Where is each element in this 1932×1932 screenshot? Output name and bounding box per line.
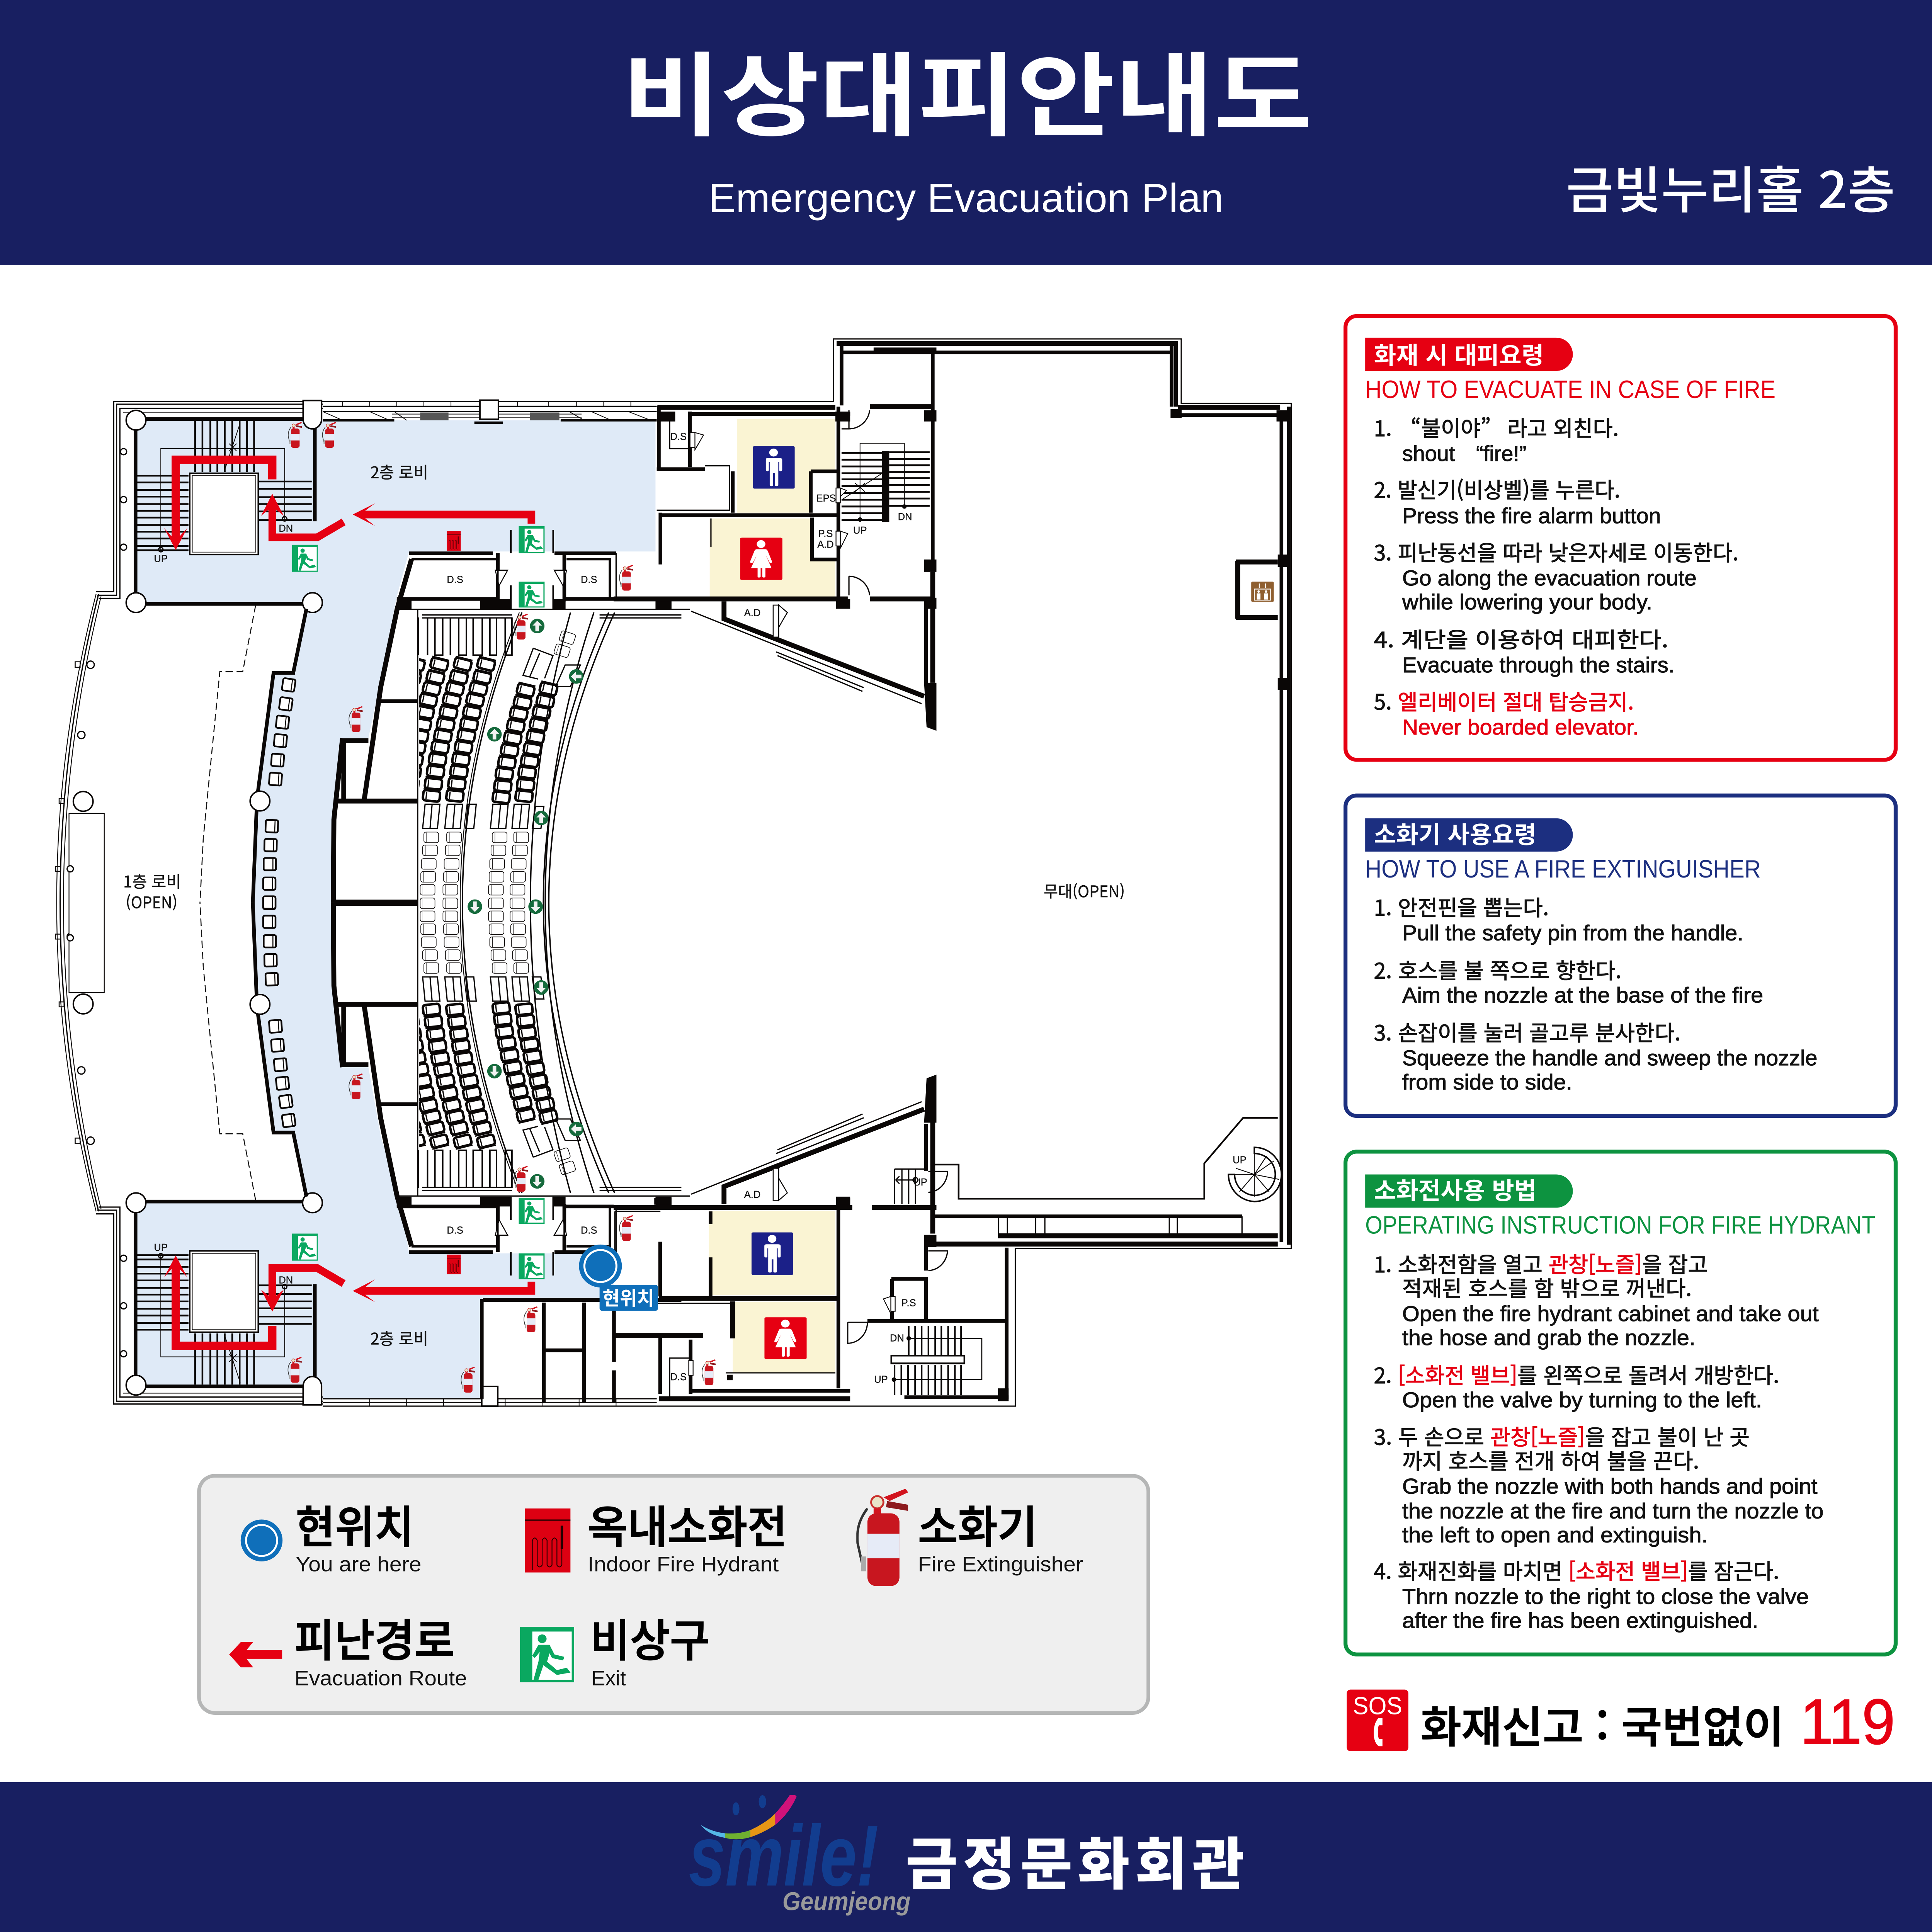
evacuation arrow: upper stair approach	[261, 494, 344, 537]
floor plan	[55, 339, 1291, 1406]
title: Korean: 비상대피안내도	[622, 22, 1312, 155]
instructions: 1. 안전핀을 뽑는다.	[1374, 891, 1549, 922]
plan labels: 무대(OPEN)	[1044, 879, 1125, 902]
lower half structure	[55, 896, 936, 1405]
fire report line	[1347, 1686, 1895, 1758]
legend: indoor hydrant: Indoor Fire Hydrant	[588, 1553, 779, 1576]
plan labels: UP	[1233, 1155, 1247, 1166]
heading text: 화재 시 대피요령	[1374, 337, 1544, 371]
instructions: 5. 엘리베이터 절대 탑승금지.	[1374, 685, 1634, 716]
instructions: 라고 외친다.	[1507, 412, 1619, 443]
plan labels: UP	[874, 1374, 888, 1385]
top window strip	[323, 400, 657, 423]
legend: evacuation route: 피난경로	[294, 1605, 455, 1669]
plan labels: A.D	[817, 539, 834, 550]
instructions: after the fire has been extinguished.	[1402, 1608, 1758, 1633]
instructions: the hose and grab the nozzle.	[1402, 1325, 1696, 1350]
legend: extinguisher: 소화기	[918, 1492, 1037, 1556]
instructions: 2. 발신기(비상벨)를 누른다.	[1374, 473, 1620, 504]
legend: exit: Exit	[592, 1667, 626, 1690]
icon: men's toilet upper	[753, 446, 795, 489]
evacuation arrow: lower stair descent	[164, 1255, 272, 1346]
you are here marker: 현위치	[602, 1284, 654, 1311]
legend: indoor hydrant	[525, 1492, 787, 1576]
panel: how to evacuate	[1345, 316, 1896, 760]
plan labels: DN	[890, 1333, 904, 1344]
instructions: 3. 피난동선을 따라 낮은자세로 이동한다.	[1374, 536, 1738, 567]
instructions: 3. 두 손으로 관창[노즐]을 잡고 불이 난 곳	[1374, 1420, 1750, 1452]
legend: exit: 비상구	[590, 1605, 710, 1669]
plan labels: UP	[154, 1242, 168, 1253]
legend: extinguisher	[857, 1489, 1083, 1586]
instructions: “fire!”	[1476, 441, 1526, 466]
icon: women's toilet lower	[764, 1317, 807, 1359]
evacuation arrow: lower corridor	[353, 1279, 531, 1302]
exit signs	[292, 526, 544, 1279]
plan labels: P.S	[901, 1298, 916, 1309]
icon: women's toilet upper	[740, 538, 782, 580]
plan labels: A.D	[744, 1189, 760, 1200]
instructions: “불이야”	[1411, 412, 1491, 443]
emergency number: 119	[1800, 1686, 1895, 1758]
legend panel	[199, 1476, 1148, 1713]
footer band	[0, 1782, 1932, 1932]
plan labels: D.S	[670, 1372, 687, 1383]
instructions: Grab the nozzle with both hands and point	[1402, 1474, 1818, 1498]
plan labels: DN	[898, 512, 912, 522]
instructions: 2. 호스를 불 쪽으로 향한다.	[1374, 954, 1621, 985]
instructions: Aim the nozzle at the base of the fire	[1402, 983, 1763, 1007]
plan labels: D.S	[581, 575, 597, 585]
bottom left rooms	[482, 1211, 703, 1402]
legend: indoor hydrant: 옥내소화전	[588, 1492, 787, 1556]
icon: SOS phone: SOS	[1353, 1692, 1402, 1719]
legend: you are here: You are here	[296, 1553, 422, 1576]
heading pill	[1365, 1174, 1573, 1208]
plan labels: (OPEN)	[126, 890, 177, 913]
evacuation arrow: lower stair approach	[261, 1268, 344, 1311]
plan labels: 1층 로비	[123, 869, 181, 892]
upper toilets and core	[614, 339, 1291, 1406]
instructions: Never boarded elevator.	[1402, 715, 1639, 739]
plan labels: UP	[154, 553, 168, 564]
bottom window strip	[323, 1386, 657, 1406]
heading text: 소화기 사용요령	[1374, 816, 1536, 850]
instructions: 적재된 호스를 함 밖으로 꺼낸다.	[1402, 1272, 1692, 1303]
plan labels: D.S	[581, 1225, 597, 1236]
english heading: HOW TO EVACUATE IN CASE OF FIRE	[1365, 375, 1776, 403]
icon: SOS phone	[1347, 1690, 1408, 1751]
plan labels: D.S	[447, 1225, 463, 1236]
instructions: the nozzle at the fire and turn the nozzle to	[1402, 1498, 1823, 1523]
legend: you are here: 현위치	[296, 1492, 414, 1556]
evacuation arrow: upper stair descent	[164, 460, 272, 550]
lobby floor area	[136, 420, 655, 1399]
indoor fire hydrants	[447, 531, 461, 1274]
instructions: 3. 손잡이를 눌러 골고루 분사한다.	[1374, 1016, 1680, 1047]
evacuation arrow: upper corridor	[353, 503, 531, 526]
plan labels: DN	[279, 523, 293, 534]
instructions: Go along the evacuation route	[1402, 566, 1697, 590]
plan labels: UP	[853, 525, 867, 536]
instructions: 까지 호스를 전개 하여 불을 끈다.	[1402, 1444, 1699, 1476]
plan labels: D.S	[670, 432, 687, 442]
panel: fire hydrant operation	[1345, 1151, 1896, 1655]
instructions: Open the fire hydrant cabinet and take out	[1402, 1301, 1819, 1326]
heading pill	[1365, 338, 1573, 371]
instructions: Squeeze the handle and sweep the nozzle	[1402, 1046, 1817, 1070]
plan labels: 2층 로비	[371, 1326, 428, 1349]
icon: elevator	[1251, 582, 1274, 602]
english heading: HOW TO USE A FIRE EXTINGUISHER	[1365, 855, 1761, 883]
legend: you are here	[241, 1492, 422, 1576]
instructions: 1. 소화전함을 열고 관창[노즐]을 잡고	[1374, 1248, 1708, 1279]
aisle direction arrows	[468, 619, 583, 1189]
instructions: shout	[1402, 441, 1455, 466]
instructions	[1374, 1248, 1823, 1633]
instructions: Open the valve by turning to the left.	[1402, 1388, 1762, 1412]
plan labels: EPS	[816, 493, 836, 504]
instructions: Evacuate through the stairs.	[1402, 653, 1675, 677]
instructions: 2. [소화전 밸브]를 왼쪽으로 돌려서 개방한다.	[1374, 1359, 1779, 1390]
instructions	[1374, 412, 1738, 739]
header band	[0, 0, 1932, 265]
instructions: 4. 계단을 이용하여 대피한다.	[1374, 623, 1668, 654]
heading text: 소화전사용 방법	[1374, 1172, 1536, 1206]
plan labels: DN	[279, 1275, 293, 1286]
english heading: OPERATING INSTRUCTION FOR FIRE HYDRANT	[1365, 1211, 1875, 1239]
plan labels: 2층 로비	[371, 459, 428, 483]
plan labels: A.D	[744, 608, 760, 619]
instructions: while lowering your body.	[1402, 590, 1652, 614]
report text: 화재신고 : 국번없이	[1421, 1693, 1784, 1755]
title: English: Emergency Evacuation Plan	[709, 176, 1223, 221]
outer curved lobby wall	[57, 594, 104, 1211]
you are here marker	[579, 1245, 658, 1311]
instructions: 1.	[1374, 412, 1392, 443]
centre light seats	[420, 832, 529, 973]
panel: fire extinguisher use	[1345, 796, 1896, 1116]
instructions	[1374, 891, 1817, 1094]
heading pill	[1365, 818, 1573, 852]
legend: evacuation route	[229, 1605, 467, 1690]
instructions: the left to open and extinguish.	[1402, 1522, 1708, 1547]
plan labels: D.S	[447, 575, 463, 585]
logo: smile: Geumjeong	[782, 1887, 911, 1916]
lower toilets and core	[614, 1118, 1281, 1401]
plan labels	[123, 432, 1247, 1385]
legend: extinguisher: Fire Extinguisher	[918, 1553, 1083, 1576]
instructions: 4. 화재진화를 마치면 [소화전 밸브]를 잠근다.	[1374, 1554, 1779, 1586]
plan labels: P.S	[818, 528, 833, 539]
instructions: Press the fire alarm button	[1402, 503, 1661, 528]
organisation name: 금정문화회관	[906, 1819, 1245, 1901]
stage curves	[460, 612, 615, 1193]
logo: smile: smile!	[689, 1808, 879, 1904]
upper half structure	[55, 401, 936, 909]
instructions: from side to side.	[1402, 1070, 1572, 1094]
fire extinguishers	[288, 422, 716, 1393]
icon: men's toilet lower	[752, 1232, 793, 1275]
legend: exit	[520, 1605, 710, 1690]
legend: evacuation route: Evacuation Route	[294, 1667, 467, 1690]
plan labels: UP	[913, 1177, 927, 1188]
floor name: 금빛누리홀 2층	[1566, 150, 1895, 223]
instructions: Pull the safety pin from the handle.	[1402, 920, 1743, 945]
instructions: Thrn nozzle to the right to close the valve	[1402, 1584, 1809, 1609]
